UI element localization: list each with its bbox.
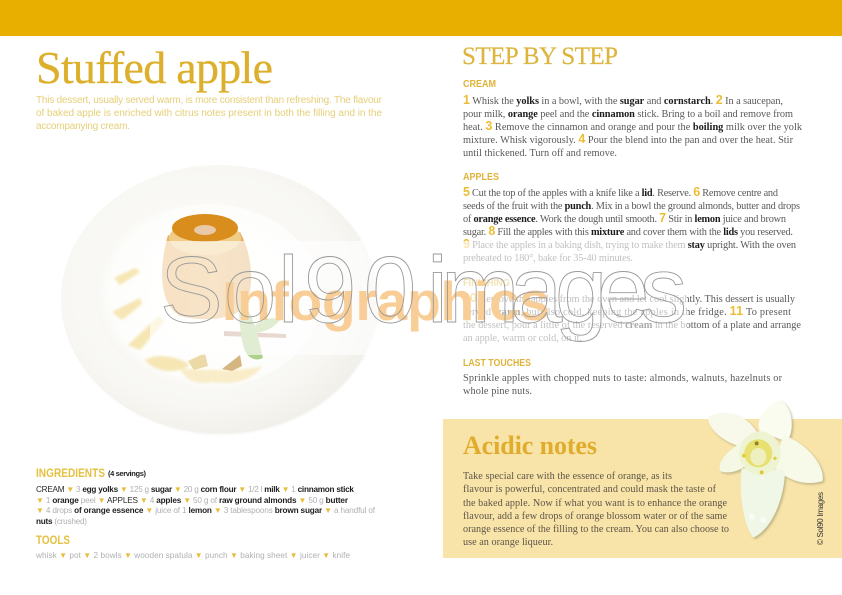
panel background <box>443 419 842 558</box>
cream steps: mixture. Whisk vigorously. 4 Pour the blend into the pan and over the heat. Stir <box>463 132 794 146</box>
cream heading: CREAM <box>463 79 496 90</box>
panel text: the baked apple. Now if what you want is to enhance the orange <box>463 498 727 509</box>
panel text: Take special care with the essence of orange, as its <box>463 471 672 482</box>
finishing steps: an apple, warm or cold, on it. <box>463 333 582 344</box>
intro text: of baked apple is enriched with citrus notes present in both the filling and in the <box>36 108 382 119</box>
ingredients heading: (4 servings) <box>108 469 146 478</box>
panel: acidic notes <box>443 400 842 558</box>
tools list: whisk ▼ pot ▼ 2 bowls ▼ wooden spatula ▼ punch ▼ baking sheet ▼ juicer ▼ knife <box>35 551 350 560</box>
cream steps: heat. 3 Remove the cinnamon and orange and pour the boiling milk over the yolk <box>463 119 803 133</box>
ingredients list: ▼ 1 orange peel ▼ APPLES ▼ 4 apples ▼ 50 g of raw ground almonds ▼ 50 g butter <box>36 496 349 505</box>
cream steps <box>463 93 803 159</box>
watermark veil <box>150 241 687 355</box>
finishing steps: 10 Remove the apples from the oven and let cool slightly. This dessert is usually <box>463 291 796 305</box>
finishing steps: the dessert, pour a little of the reserved cream in the bottom of a plate and arrange <box>463 320 801 331</box>
ingredients list: CREAM ▼ 3 egg yolks ▼ 125 g sugar ▼ 20 g corn flour ▼ 1/2 l milk ▼ 1 cinnamon stick <box>36 485 354 494</box>
apples steps <box>463 185 800 264</box>
apples heading: APPLES <box>463 172 499 183</box>
panel text: orange essence of the filling to the cream. You can also choose to <box>463 524 729 535</box>
plate <box>61 165 378 434</box>
finishing steps: served warm, but also cold, keeping the apples in the fridge. 11 To present <box>463 304 791 318</box>
apples steps: preheated to 180°, bake for 35-40 minutes. <box>463 253 633 264</box>
sauce <box>112 268 262 383</box>
watermark outlined word: Sol90images <box>160 237 687 342</box>
top colour band <box>0 0 842 36</box>
last touches heading: LAST TOUCHES <box>463 358 531 369</box>
step by step heading: STEP BY STEP <box>462 43 618 70</box>
finishing heading: FINISHING <box>463 278 510 289</box>
watermark orange word: Infographics <box>222 270 550 332</box>
intro text <box>36 95 383 132</box>
apples steps: of orange essence. Work the dough until smooth. 7 Stir in lemon juice and brown <box>463 211 786 225</box>
section: finishing <box>463 278 801 344</box>
garnish <box>188 300 286 371</box>
tools <box>35 535 350 560</box>
section: cream <box>463 79 803 159</box>
apples steps: seeds of the fruit with the punch. Mix in a bowl the ground almonds, butter and drops <box>463 201 800 212</box>
intro text: accompanying cream. <box>36 121 130 132</box>
watermark: Sol90images Infographics <box>150 237 687 355</box>
intro text: This dessert, usually served warm, is more consistent than refreshing. The flavour <box>36 95 383 106</box>
panel heading: Acidic notes <box>463 431 597 460</box>
image credit: © Sol90 Images <box>816 492 825 545</box>
apples steps: sugar. 8 Fill the apples with this mixture and cover them with the lids you reserved. <box>463 224 793 238</box>
icon: orange blossom <box>708 400 824 539</box>
apples steps: 9 Place the apples in a baking dish, trying to make them stay upright. With the oven <box>463 237 796 251</box>
last touches text: Sprinkle apples with chopped nuts to taste: almonds, walnuts, hazelnuts or <box>463 373 783 384</box>
ingredients list: ▼ 4 drops of orange essence ▼ juice of 1 lemon ▼ 3 tablespoons brown sugar ▼ a handful of <box>36 506 376 515</box>
panel text: flavour is powerful, concentrated and could mask the taste of <box>463 484 717 495</box>
finishing steps <box>463 291 801 344</box>
title: Stuffed apple <box>36 42 273 93</box>
cream steps: until thickened. Turn off and remove. <box>463 148 617 159</box>
photo: plate with stuffed apple <box>61 165 378 434</box>
cream steps: 1 Whisk the yolks in a bowl, with the sugar and cornstarch. 2 In a saucepan, <box>463 93 783 107</box>
panel text <box>463 471 729 548</box>
apples steps: 5 Cut the top of the apples with a knife like a lid. Reserve. 6 Remove centre and <box>463 185 779 199</box>
ingredients <box>36 468 376 526</box>
stuffed apple <box>162 214 251 319</box>
tools heading: TOOLS <box>36 535 70 547</box>
panel text: flavour, add a few drops of orange blossom water or of the same <box>463 511 727 522</box>
last touches text <box>463 373 783 397</box>
section: last touches <box>463 358 783 397</box>
ingredients heading: INGREDIENTS <box>36 468 105 480</box>
panel text: use an orange liqueur. <box>463 537 553 548</box>
cream steps: pour milk, orange peel and the cinnamon stick. Bring to a boil and remove from <box>463 109 793 120</box>
last touches text: whole pine nuts. <box>463 386 532 397</box>
ingredients list: nuts (crushed) <box>36 517 87 526</box>
ingredients list <box>36 485 376 526</box>
section: apples <box>463 172 800 264</box>
